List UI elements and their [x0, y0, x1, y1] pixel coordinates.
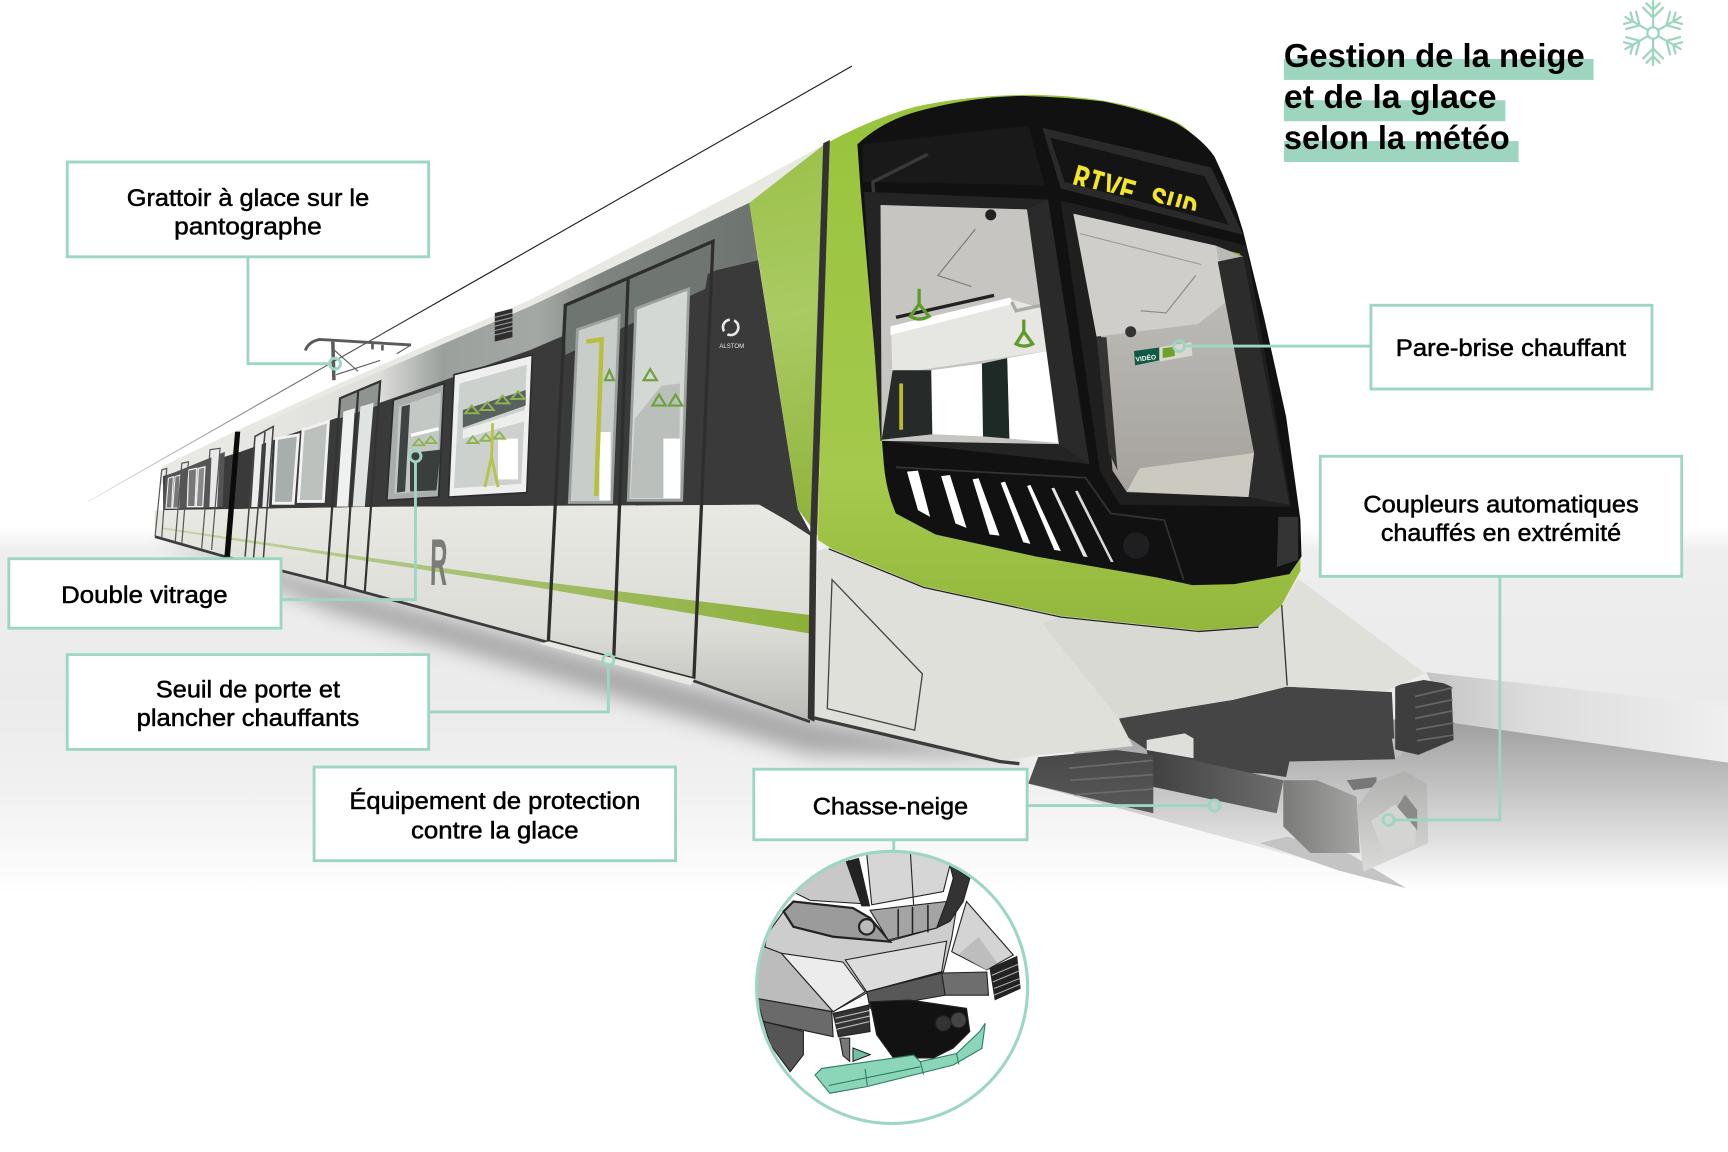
right interior — [1073, 214, 1254, 497]
side windows C and D — [273, 422, 328, 503]
left windshield — [864, 192, 1089, 464]
door interior dark parts — [630, 384, 680, 498]
track floor on the right — [1028, 705, 1728, 893]
window A handles and pole — [465, 391, 525, 443]
logo Alstom — [719, 320, 744, 350]
bright windows — [931, 364, 983, 436]
door sill — [539, 641, 694, 685]
inset ring — [757, 851, 1028, 1124]
left glass — [796, 860, 861, 904]
green plough — [815, 1023, 985, 1093]
title text: et de la glace — [1284, 79, 1497, 116]
side window A — [449, 355, 532, 497]
left interior ceiling — [881, 205, 1059, 444]
callout: Coupleurs automatiques — [1320, 456, 1682, 825]
right door window — [628, 289, 689, 500]
headlight — [1123, 532, 1149, 559]
window B frame — [387, 384, 444, 500]
lower apparatus — [1260, 836, 1406, 888]
callout: Grattoir à glace: Grattoir à glace sur le — [127, 186, 369, 212]
central facet — [845, 941, 947, 992]
grab handles — [910, 289, 1033, 346]
right coupler cover — [1395, 680, 1454, 755]
door glass tint — [565, 241, 713, 355]
camera — [1125, 326, 1136, 337]
train shadow — [155, 537, 1036, 760]
background ground gradient — [0, 529, 1728, 898]
left door window — [569, 315, 619, 503]
logo Alstom: ALSTOM — [719, 344, 744, 350]
left interior lit panel — [891, 299, 1047, 370]
skirt centre facet — [1043, 605, 1287, 719]
right windshield — [1061, 201, 1291, 507]
underside band — [757, 998, 833, 1037]
title — [1284, 38, 1594, 162]
left windshield glass — [864, 192, 1089, 464]
callout: Seuil de porte — [67, 655, 614, 749]
callout: Double vitrage: Double vitrage — [61, 583, 228, 609]
main dark underframe — [1119, 687, 1395, 777]
mask under windshield — [870, 901, 947, 940]
window A interior — [454, 365, 527, 488]
inset drawing — [756, 849, 1020, 1093]
lettre R: R — [430, 525, 448, 600]
right corner — [1392, 738, 1417, 759]
title text: selon la météo — [1284, 120, 1510, 157]
dark arch — [937, 865, 970, 928]
right box — [942, 972, 989, 995]
green cab-side panel — [749, 142, 827, 536]
video sign — [1134, 342, 1192, 365]
coupler head — [1357, 771, 1428, 872]
green side stripe — [162, 527, 810, 634]
grille white slashes — [907, 471, 1114, 562]
grab rail — [1012, 302, 1041, 311]
callout: Équipement de protection: Équipement de protection — [349, 788, 640, 815]
door yellow pole — [586, 339, 602, 496]
callout: Équipement de protection: contre la glace — [411, 819, 579, 845]
near door pair — [539, 241, 713, 685]
upper side band — [161, 196, 758, 485]
door frame — [548, 241, 713, 679]
overhead contact wire — [88, 66, 852, 501]
yellow pole — [899, 384, 903, 430]
inset: snow plough technical view — [756, 849, 1028, 1124]
upper left panel and wiper — [863, 126, 1045, 393]
video sign: VIDÉO — [1135, 352, 1157, 364]
callout: Coupleurs automatiques: chauffés en extrémité — [1381, 521, 1621, 547]
legs — [763, 1022, 803, 1072]
right dark pillar — [1218, 256, 1289, 505]
underframe opening — [1147, 733, 1194, 758]
right wing — [952, 901, 1013, 970]
skirt bottom edge — [812, 717, 1019, 764]
skirt access panel — [827, 580, 922, 730]
train: full vehicle illustration — [154, 95, 1454, 888]
left coupler cover — [1028, 750, 1153, 813]
coupler upper fitting — [1347, 777, 1376, 790]
right windshield glass — [1061, 201, 1291, 507]
window A frame — [449, 355, 532, 497]
left grille — [833, 1005, 870, 1037]
callout: Seuil de porte: plancher chauffants — [137, 706, 359, 732]
right side wing — [1282, 579, 1425, 691]
callout: Chasse-neige — [754, 769, 1220, 852]
callout: Équipement de protection — [314, 767, 676, 861]
cab white skirt — [812, 548, 1287, 762]
drawbar — [1147, 750, 1283, 813]
lower white side — [154, 505, 813, 722]
title text: Gestion de la neige — [1284, 38, 1585, 75]
black inter-car gangway — [224, 432, 240, 557]
callout: Pare-brise chauffant: Pare-brise chauffant — [1396, 336, 1626, 362]
side window B — [387, 384, 444, 500]
callout: Coupleurs automatiques: Coupleurs automatiques — [1363, 492, 1639, 518]
callout: Seuil de porte: Seuil de porte et — [156, 678, 340, 704]
coupler — [870, 1000, 970, 1058]
left grey face — [756, 944, 833, 1012]
glass frame — [846, 858, 870, 906]
dark wall column — [882, 370, 933, 440]
underframe — [1119, 687, 1417, 777]
roof strip — [162, 143, 827, 469]
icon: snowflake — [1620, 1, 1686, 65]
sign text: RIVE SUD — [1067, 159, 1201, 233]
window B interior — [395, 392, 441, 494]
front pillar — [808, 140, 830, 722]
central glass — [866, 849, 950, 905]
title text — [1284, 38, 1585, 157]
destination sign — [1043, 128, 1243, 235]
dark band under front — [867, 973, 945, 1008]
callout: Grattoir à glace: pantographe — [174, 215, 322, 241]
ceiling panel outline — [938, 229, 975, 287]
callout: Chasse-neige: Chasse-neige — [813, 794, 968, 820]
third door — [245, 426, 273, 558]
far cars — [155, 448, 225, 550]
callout: Double vitrage — [9, 451, 421, 628]
grille frame — [896, 467, 1184, 580]
left lit facet — [781, 953, 865, 1012]
small teal wedge — [853, 1048, 870, 1061]
right grille — [990, 957, 1020, 1000]
dark jamb — [1097, 337, 1117, 471]
seat — [1127, 453, 1254, 497]
door handles — [605, 369, 682, 406]
lower body band — [756, 908, 957, 1012]
dark line — [896, 295, 994, 317]
green lower edge line — [829, 549, 1259, 631]
pantograph — [305, 339, 411, 380]
black cab mask — [857, 96, 1302, 585]
coupler body — [1283, 780, 1360, 853]
grille oval — [784, 901, 890, 942]
camera dome — [985, 209, 996, 220]
station wall on the right — [1426, 672, 1728, 763]
cab green shell — [818, 95, 1300, 630]
callout: Grattoir à glace — [67, 162, 429, 369]
callout: Pare-brise chauffant — [1174, 305, 1652, 389]
dark window band — [163, 260, 813, 538]
lighter ceiling — [1073, 214, 1225, 337]
left pillar — [1027, 199, 1089, 464]
title highlight bars — [1284, 59, 1594, 162]
lower body edge — [155, 537, 810, 722]
side marker lamp — [1277, 517, 1298, 567]
second door — [327, 381, 380, 592]
roof vent — [495, 309, 512, 342]
